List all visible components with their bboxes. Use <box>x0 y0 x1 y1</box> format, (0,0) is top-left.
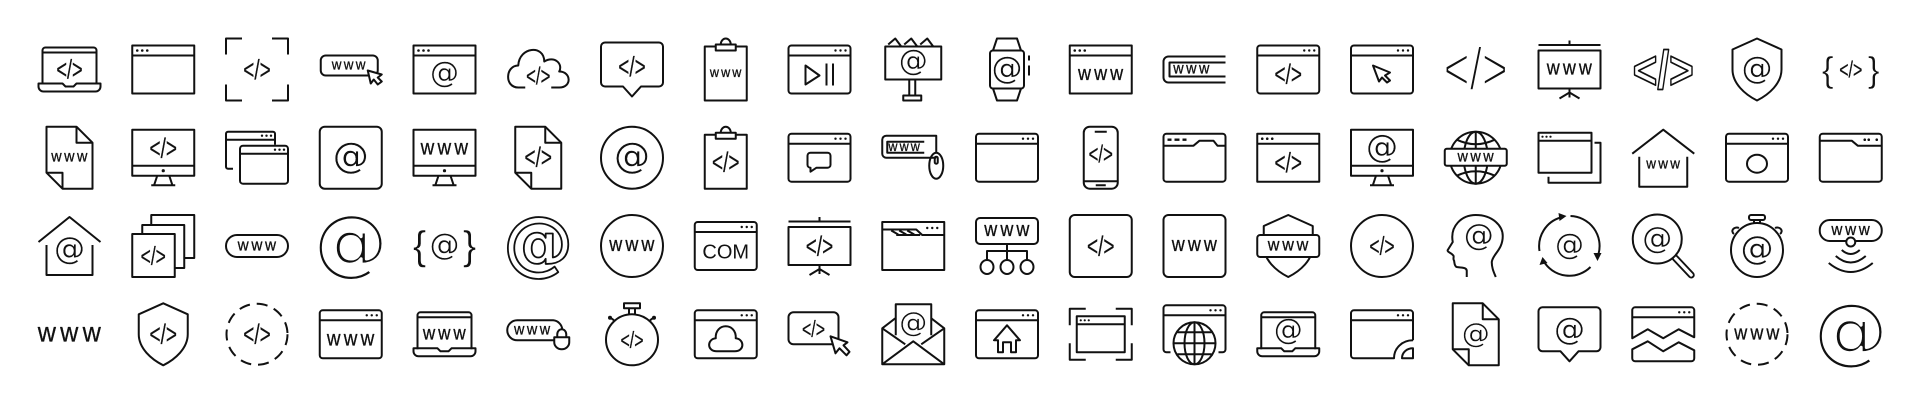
icon: desktop monitor www <box>414 130 476 185</box>
icon: browser www large: www <box>326 327 377 351</box>
icon: browser chat bubble <box>788 134 850 182</box>
icon: browser circle <box>1726 134 1788 182</box>
icon: rounded square at sign: @ <box>333 136 369 177</box>
icon: laptop www <box>414 312 476 356</box>
icon: outlined code symbol: </> <box>1633 41 1694 101</box>
icon: speech bubble code: </> <box>618 51 646 83</box>
icon: rounded square www <box>1164 215 1226 277</box>
icon: globe www <box>1445 132 1507 184</box>
icon: plain www: www <box>37 316 105 348</box>
icon: www pill: www <box>237 236 279 255</box>
icon: laptop www: www <box>422 322 469 344</box>
icon: code box with cursor <box>788 312 850 355</box>
icon: presentation board www: www <box>1546 58 1595 80</box>
icon: shield code: </> <box>150 319 177 351</box>
icon: window in focus brackets <box>1070 309 1132 360</box>
icon: large at sign outline: @ <box>1813 286 1888 374</box>
icon: braces at sign <box>413 224 476 268</box>
icon: dashed circle code: </> <box>243 319 271 351</box>
icon: address bar with mouse <box>882 136 943 179</box>
icon: www pill <box>226 235 288 257</box>
icon: magnifier at sign: @ <box>1642 221 1672 256</box>
icon: head with at sign <box>1448 215 1503 277</box>
icon: browser COM <box>695 222 757 270</box>
icon: www button with cursor: www <box>331 57 368 74</box>
icon: address bar with mouse: www <box>887 139 922 154</box>
icon row 3 <box>38 198 1882 286</box>
icon: browser house <box>976 310 1038 358</box>
icon: document at sign <box>1453 303 1499 365</box>
icon: circle www: www <box>608 234 657 256</box>
icon: refresh cycle at sign: @ <box>1555 228 1584 262</box>
icon: browser with tabs <box>882 222 944 270</box>
icon: browser window www <box>1070 46 1132 94</box>
icon: desktop monitor code <box>132 130 194 185</box>
icon: braces code <box>1822 50 1880 90</box>
icon: house www <box>1632 130 1694 187</box>
icon: presentation board code <box>788 217 850 275</box>
icon: speech bubble at sign: @ <box>1554 311 1585 347</box>
icon: double line at sign: @ <box>503 202 573 284</box>
icon: speech bubble at sign <box>1538 307 1600 361</box>
icon: document www: www <box>50 148 90 166</box>
icon: rounded square www: www <box>1171 234 1220 256</box>
icon: dashed circle code <box>226 304 288 365</box>
icon: billboard at sign: @ <box>899 44 928 78</box>
icon: browser cursor <box>1351 46 1413 94</box>
icon: house www: www <box>1645 156 1682 173</box>
icon: code box with cursor: </> <box>802 317 825 343</box>
icon: laptop code <box>38 48 100 92</box>
icon: dashed circle www: www <box>1733 322 1782 345</box>
icon: blank browser window <box>132 46 194 94</box>
icon: rounded square code: </> <box>1087 231 1114 262</box>
icon: address bar: www <box>1172 60 1212 78</box>
icon: circle www <box>601 215 663 277</box>
icon: document code: </> <box>525 142 552 174</box>
icon: globe www: www <box>1457 148 1496 166</box>
icon: braces at sign: } <box>463 224 476 268</box>
icon: presentation board code: </> <box>806 231 833 262</box>
icon: stopwatch at sign <box>1731 215 1783 277</box>
icon: browser window www: www <box>1077 63 1126 85</box>
icon: smartwatch at sign <box>990 38 1029 100</box>
icon: browser cloud <box>695 310 757 358</box>
icon: dashed circle www <box>1726 304 1788 365</box>
icon: head with at sign: @ <box>1464 218 1494 253</box>
icon: shield at sign <box>1732 38 1782 100</box>
icon: shield with www band <box>1257 215 1319 277</box>
icon: large at sign: @ <box>313 198 388 286</box>
icon: laptop at sign: @ <box>1274 312 1303 346</box>
icon: shield code <box>139 303 188 365</box>
icon: braces code: { <box>1822 50 1834 90</box>
icon: desktop monitor www: www <box>420 137 471 160</box>
icon: overlapping windows <box>226 132 288 184</box>
icon: browser code left dots <box>1257 134 1319 182</box>
icon: smartphone code <box>1084 127 1118 189</box>
icon row 4 <box>37 286 1888 374</box>
icon: smartwatch at sign: @ <box>992 50 1022 86</box>
icon: desktop monitor at sign <box>1351 128 1413 185</box>
icon: house at sign: @ <box>54 231 85 267</box>
icon: browser with globe <box>1164 305 1226 364</box>
icon: browser window at sign: @ <box>430 56 459 90</box>
icon: document code <box>515 127 561 189</box>
icon: browser COM: COM <box>702 242 749 264</box>
icon: clipboard www: www <box>709 64 744 80</box>
icon row 1 <box>38 36 1880 103</box>
icon: torn browser window <box>1632 307 1694 361</box>
icon: code in focus brackets: </> <box>243 54 271 86</box>
icon: browser code: </> <box>1275 59 1302 90</box>
icon: shield at sign: @ <box>1742 50 1772 86</box>
icon: magnifier at sign <box>1633 214 1691 275</box>
icon: www network tree <box>976 218 1038 274</box>
icon: www pill with padlock: www <box>513 321 553 339</box>
icon: desktop monitor at sign: @ <box>1366 128 1398 166</box>
icon: window with shadow pane <box>1538 133 1600 183</box>
icon: document at sign: @ <box>1462 316 1490 349</box>
icon: large code symbol: </> <box>1444 36 1508 103</box>
icon: rounded square code <box>1070 215 1132 277</box>
icon: braces code: </> <box>1839 57 1862 83</box>
icon: circle code: </> <box>1369 232 1395 261</box>
icon: clipboard www <box>705 38 747 100</box>
icon: document www <box>46 127 92 189</box>
icon: laptop code: </> <box>56 54 83 84</box>
icon: braces code: } <box>1868 50 1880 90</box>
icon: desktop monitor code: </> <box>150 133 177 165</box>
icon: cloud code: </> <box>526 63 550 90</box>
icon: browser code <box>1257 46 1319 94</box>
icon: stopwatch code: </> <box>620 328 644 354</box>
icon: window with curled corner <box>1351 310 1413 358</box>
icon: www network tree: www <box>983 219 1032 241</box>
icon: braces at sign: @ <box>430 228 460 262</box>
icon: stopwatch at sign: @ <box>1740 228 1774 268</box>
icon: window folder right tab <box>1820 134 1882 182</box>
icon: blank rounded window <box>976 134 1038 182</box>
icon: presentation board www <box>1538 40 1600 98</box>
icon: browser code left dots: </> <box>1275 148 1302 179</box>
icon: speech bubble code <box>601 42 663 96</box>
icon: smartphone code: </> <box>1089 141 1113 168</box>
icon: billboard at sign <box>885 38 941 100</box>
icon: stacked pages code: </> <box>141 242 166 271</box>
icon: refresh cycle at sign <box>1539 213 1602 276</box>
icon: browser window at sign <box>414 46 476 94</box>
icon: rounded square at sign <box>320 127 382 189</box>
icon: house at sign <box>38 217 100 275</box>
icon: code in focus brackets <box>226 38 288 100</box>
icon: stopwatch code <box>606 303 658 365</box>
icon: browser www large <box>320 310 382 358</box>
icon: open envelope at sign: @ <box>899 305 927 338</box>
icon: open envelope at sign <box>882 304 944 364</box>
icon: shield with www band: www <box>1267 235 1311 255</box>
icon: cloud code <box>508 50 569 90</box>
icon: www wireless signal: www <box>1830 220 1872 239</box>
icon: laptop at sign <box>1257 312 1319 356</box>
icon: circle at sign <box>601 127 663 189</box>
icon row 2 <box>46 127 1882 189</box>
icon: www button with cursor <box>321 56 382 84</box>
icon: clipboard code: </> <box>712 147 739 179</box>
icon: www wireless signal <box>1820 220 1882 272</box>
icon: address bar <box>1164 56 1226 82</box>
icon: circle at sign: @ <box>614 136 650 177</box>
icon: circle code <box>1351 215 1413 277</box>
icon: www pill with padlock <box>507 320 569 349</box>
icon: stacked pages code <box>132 215 194 277</box>
icon: browser play pause <box>788 46 850 94</box>
icon: window with folder tab <box>1164 134 1226 182</box>
icon: clipboard code <box>705 127 747 189</box>
icon: braces at sign: { <box>413 224 426 268</box>
